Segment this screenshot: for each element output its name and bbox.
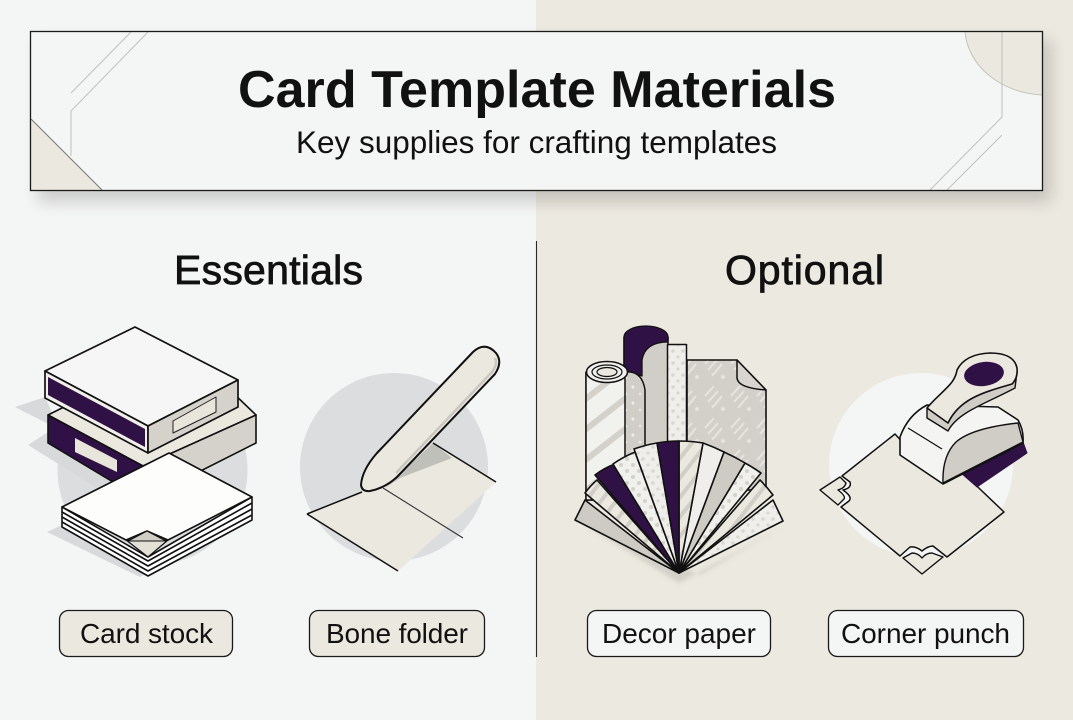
label: Card stock: Card stock	[80, 618, 214, 649]
background: essentials side	[0, 0, 536, 720]
icon: bone folder	[300, 347, 499, 571]
heading: Essentials: Essentials	[174, 247, 363, 293]
punch body	[900, 405, 1023, 484]
icon: decor paper	[575, 326, 785, 583]
paper stack	[62, 497, 252, 576]
tall strip	[668, 344, 686, 464]
lower box	[48, 408, 256, 500]
upper box	[45, 327, 238, 426]
punch handle	[927, 372, 1017, 431]
fan of swatches	[585, 525, 785, 583]
banner corner: right quarter circle	[965, 32, 1042, 95]
purple base	[961, 442, 1027, 487]
background: optional side	[536, 0, 1073, 720]
label: Corner punch: Corner punch	[841, 618, 1010, 649]
label: Corner punch	[828, 610, 1024, 656]
folder tool	[361, 347, 499, 491]
flat sheet	[687, 360, 766, 490]
spiral roll	[586, 372, 645, 500]
title banner	[30, 32, 1051, 202]
purple roll	[624, 337, 668, 490]
center divider	[536, 241, 538, 657]
title: Card Template Materials	[238, 61, 836, 119]
icon: card stock	[15, 327, 256, 577]
label: Decor paper	[588, 610, 770, 656]
punch hole	[963, 359, 1005, 389]
banner corner: left triangle	[31, 119, 102, 190]
label: Bone folder: Bone folder	[326, 618, 468, 649]
paper with punched corners	[841, 434, 1004, 557]
icon: corner punch	[820, 353, 1027, 574]
heading: Optional: Optional	[725, 247, 884, 293]
label: Card stock	[60, 610, 232, 656]
label: Decor paper: Decor paper	[602, 618, 756, 649]
subtitle: Key supplies for crafting templates	[296, 124, 777, 160]
label: Bone folder	[310, 610, 484, 656]
